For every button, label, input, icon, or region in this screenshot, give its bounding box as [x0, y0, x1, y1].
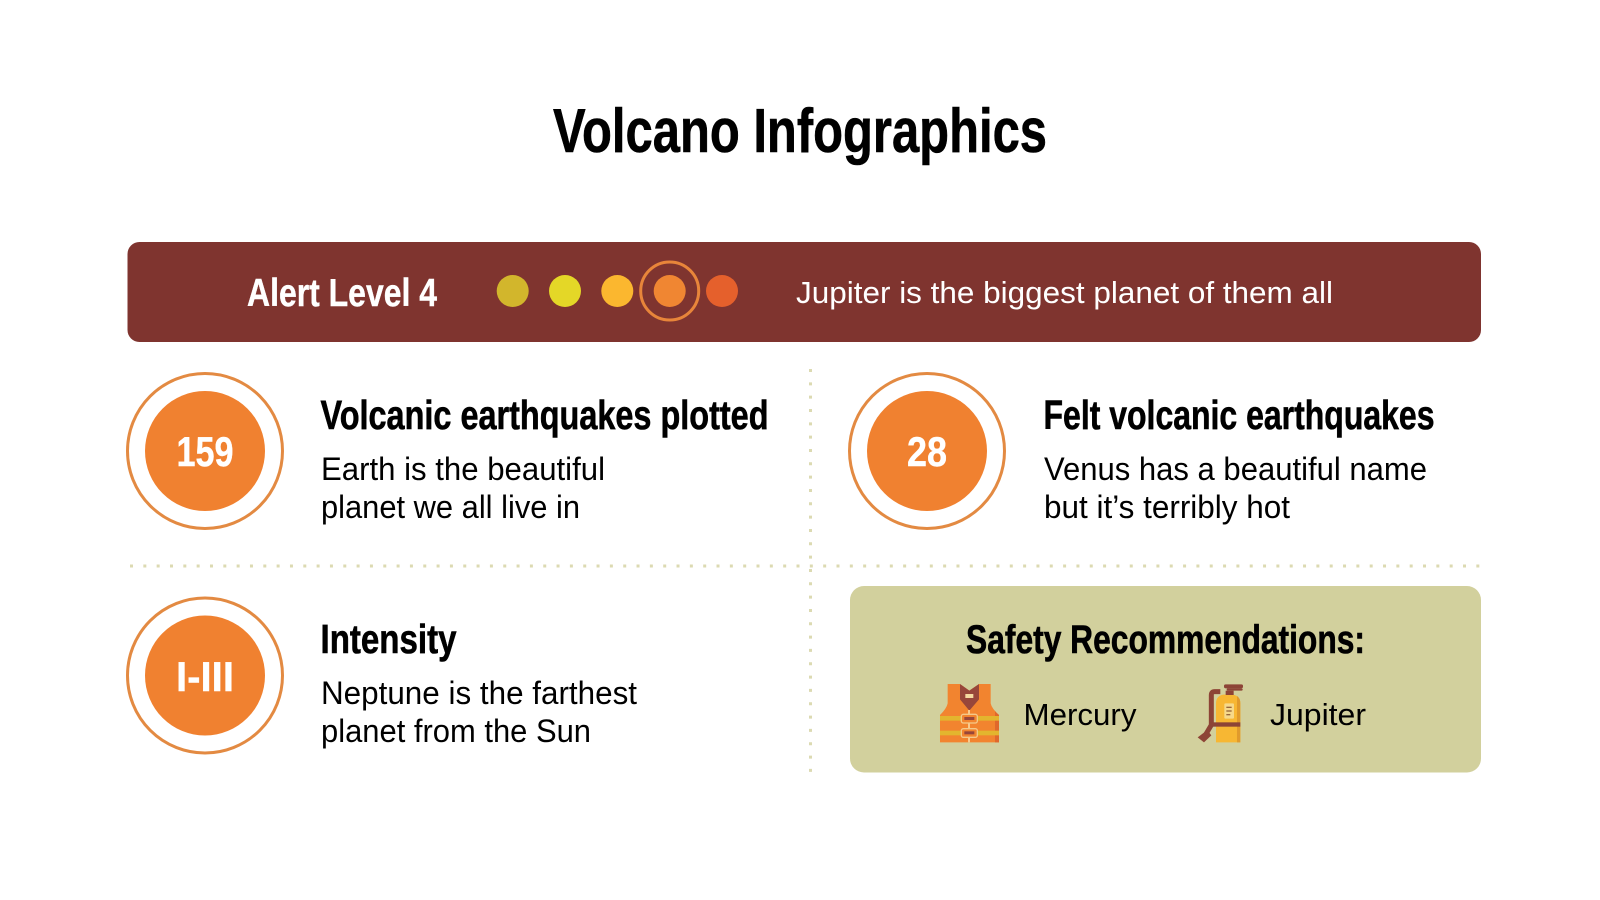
heading: Felt volcanic earthquakes — [1044, 392, 1434, 438]
heading: Intensity — [320, 616, 457, 662]
alert level heading: Alert Level 4 — [247, 272, 437, 315]
dotted divider vertical — [809, 369, 812, 772]
badge: I-III — [128, 598, 282, 753]
description: Venus has a beautiful name — [1044, 451, 1427, 487]
description: planet we all live in — [321, 489, 580, 525]
icon: life vest — [940, 684, 999, 742]
badge: 28 — [850, 374, 1004, 528]
description — [1044, 451, 1427, 525]
alert description: Jupiter is the biggest planet of them all — [796, 275, 1333, 310]
icon: fire extinguisher — [1198, 684, 1243, 742]
safety heading: Safety Recommendations: — [966, 618, 1365, 662]
alert level indicator dots — [497, 262, 738, 320]
panel: alert level banner — [128, 242, 1481, 342]
badge: 159: 159 — [176, 428, 234, 475]
description — [321, 451, 605, 525]
heading: Volcanic earthquakes plotted — [320, 392, 768, 438]
description: but it’s terribly hot — [1044, 489, 1290, 525]
badge: I-III: I-III — [176, 653, 234, 700]
label: Mercury: Mercury — [1024, 697, 1137, 732]
badge: 28: 28 — [907, 428, 947, 475]
badge: 159 — [128, 374, 282, 528]
panel: safety recommendations — [850, 586, 1481, 772]
label: Jupiter: Jupiter — [1270, 697, 1366, 732]
title: Volcano Infographics — [553, 97, 1047, 166]
stat: intensity — [128, 598, 637, 753]
description: Earth is the beautiful — [321, 451, 605, 487]
dotted divider horizontal — [130, 564, 1480, 568]
description: planet from the Sun — [321, 713, 591, 749]
stat: volcanic earthquakes plotted — [128, 374, 768, 528]
description: Neptune is the farthest — [321, 675, 637, 711]
stat: felt volcanic earthquakes — [850, 374, 1434, 528]
description — [321, 675, 637, 749]
